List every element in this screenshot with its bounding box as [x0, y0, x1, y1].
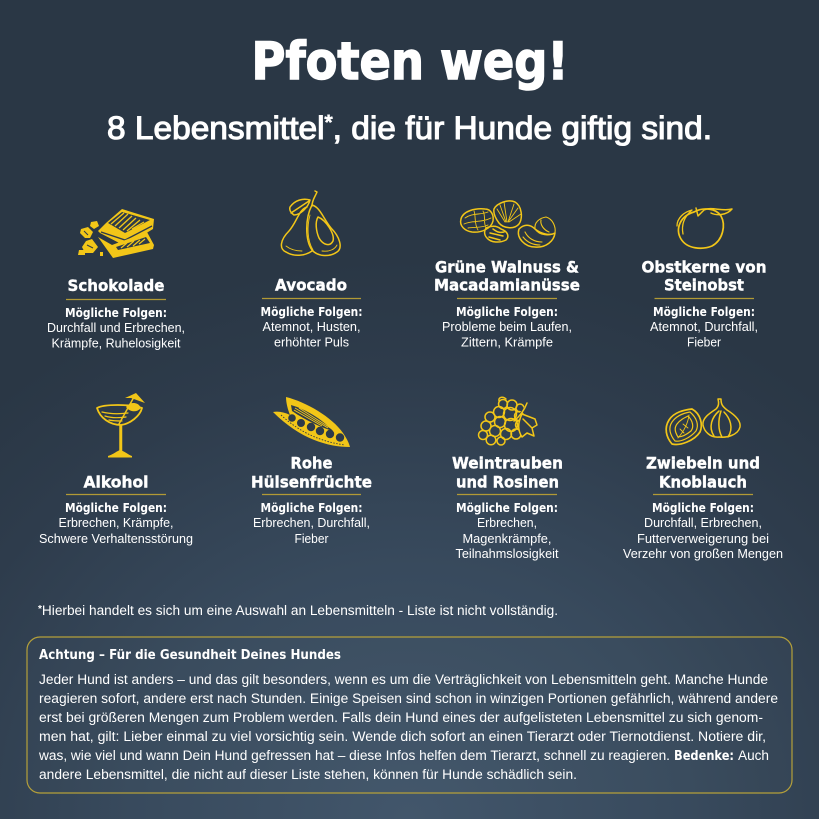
heading: Weintrauben und Rosinen: [452, 454, 563, 492]
callout panel: Achtung: [27, 637, 792, 793]
heading: Rohe Hülsenfrüchte: Rohe: [290, 454, 333, 472]
effects: Alkohol: Schwere Verhaltensstörung: [39, 531, 193, 546]
subtitle: , die für Hunde giftig sind.: [333, 110, 712, 146]
subtitle: *: [325, 112, 333, 134]
effects: Zwiebeln: [623, 500, 783, 561]
heading: Avocado: Avocado: [275, 276, 347, 294]
effects: Schokolade: Durchfall und Erbrechen,: [47, 320, 185, 335]
heading: Weintrauben und Rosinen: und Rosinen: [456, 472, 559, 492]
effects: Zwiebeln: Verzehr von großen Mengen: [623, 546, 783, 561]
subtitle: 8 Lebensmittel: [107, 110, 315, 146]
effects: Weintrauben: Magenkrämpfe,: [462, 531, 552, 546]
effects: Schokolade: Krämpfe, Ruhelosigkeit: [52, 336, 181, 350]
icon: chocolate: [78, 209, 154, 258]
effects: Avocado: [260, 304, 362, 350]
effects: Weintrauben: Mögliche Folgen:: [456, 500, 558, 515]
item: Walnuss: [434, 201, 580, 350]
icon: grapes: [478, 397, 537, 445]
heading: Grüne Walnuss und Macadamianüsse: Macadamianüsse: [434, 276, 580, 294]
heading: Alkohol: Alkohol: [84, 472, 148, 492]
icon: pea pod: [273, 397, 350, 447]
callout heading: Achtung – Für die Gesundheit Deines Hundes: [39, 648, 341, 663]
callout body text: Jeder Hund ist anders – und das gilt besonders, wenn es um die Verträglichkeit von Lebensmitteln geht. Manche Hunde: [39, 672, 768, 687]
heading: Zwiebeln und Knoblauch: [646, 454, 760, 492]
effects: Zwiebeln: Mögliche Folgen:: [652, 500, 754, 515]
callout body text: men hat, gilt: Lieber einmal zu viel vorsichtig sein. Wende dich sofort an einen Tierarzt oder Tiernotdienst. Notiere dir,: [39, 729, 766, 744]
effects: Weintrauben: [456, 500, 559, 561]
effects: Hülsenfrüchte: Fieber: [294, 531, 329, 546]
effects: Alkohol: Erbrechen, Krämpfe,: [58, 515, 174, 530]
effects: Schokolade: Mögliche Folgen:: [65, 305, 167, 320]
item: Schokolade: [47, 209, 185, 350]
icon: nuts: [461, 201, 555, 247]
item: Hülsenfrüchte: [251, 397, 372, 546]
title: Pfoten weg!: [252, 32, 568, 92]
heading: Schokolade: Schokolade: [68, 276, 165, 295]
effects: Alkohol: Mögliche Folgen:: [65, 500, 167, 515]
icon: cocktail: [97, 393, 145, 458]
effects: Walnuss: Probleme beim Laufen,: [442, 319, 572, 334]
icon: onion and garlic: [666, 399, 740, 444]
callout body text: was, wie viel und wann Dein Hund gefressen hat – diese Infos helfen dem Tierarzt, schnell zu reagieren.: [38, 748, 670, 763]
callout body text: erst bei größeren Mengen zum Problem werden. Falls dein Hund eines der aufgelisteten Lebensmittel zu sich genom-: [39, 710, 763, 725]
effects: Walnuss: Zittern, Krämpfe: [461, 334, 553, 350]
effects: Hülsenfrüchte: Erbrechen, Durchfall,: [253, 515, 370, 530]
callout body text: Bedenke:: [674, 749, 734, 764]
effects: Walnuss: [442, 304, 572, 350]
effects: Zwiebeln: Futterverweigerung bei: [637, 531, 769, 546]
item: Obstkerne: [642, 208, 766, 350]
callout body text: [38, 672, 778, 782]
effects: Weintrauben: Erbrechen,: [477, 515, 537, 530]
item: Avocado: [260, 191, 362, 350]
effects: Weintrauben: Teilnahmslosigkeit: [456, 546, 559, 561]
callout body text: Auch: [738, 748, 769, 763]
footnote: *: [38, 604, 42, 615]
callout body text: andere Lebensmittel, die nicht auf dieser Liste stehen, können für Hunde schädlich sein.: [39, 767, 577, 782]
footnote: Hierbei handelt es sich um eine Auswahl an Lebensmitteln - Liste ist nicht vollständig.: [42, 603, 558, 618]
icon: avocado: [281, 191, 340, 256]
heading: Zwiebeln und Knoblauch: Knoblauch: [659, 472, 747, 492]
heading: Rohe Hülsenfrüchte: Hülsenfrüchte: [251, 472, 372, 492]
effects: Alkohol: [39, 500, 193, 546]
effects: Obstkerne: Mögliche Folgen:: [653, 304, 755, 319]
item: Zwiebeln: [623, 399, 783, 561]
effects: Avocado: erhöhter Puls: [274, 334, 349, 350]
item: Alkohol: [39, 393, 193, 546]
effects: Hülsenfrüchte: Mögliche Folgen:: [260, 500, 362, 515]
effects: Obstkerne: [650, 304, 758, 350]
heading: Zwiebeln und Knoblauch: Zwiebeln und: [646, 454, 760, 472]
effects: Obstkerne: Atemnot, Durchfall,: [650, 319, 758, 334]
heading: Rohe Hülsenfrüchte: [251, 454, 372, 492]
effects: Hülsenfrüchte: [253, 500, 370, 546]
heading: Obstkerne von Steinobst: Steinobst: [664, 276, 744, 294]
heading: Weintrauben und Rosinen: Weintrauben: [452, 454, 563, 472]
heading: Obstkerne von Steinobst: [642, 258, 766, 294]
effects: Avocado: Atemnot, Husten,: [262, 319, 360, 334]
effects: Zwiebeln: Durchfall, Erbrechen,: [644, 515, 762, 530]
heading: Grüne Walnuss und Macadamianüsse: [434, 258, 580, 294]
effects: Obstkerne: Fieber: [687, 334, 722, 350]
effects: Walnuss: Mögliche Folgen:: [456, 304, 558, 319]
effects: Avocado: Mögliche Folgen:: [260, 304, 362, 319]
item: Weintrauben: [452, 397, 563, 561]
callout body text: reagieren sofort, andere erst nach Stunden. Einige Speisen sind schon in winzigen Portionen gefährlich, während andere: [39, 691, 778, 706]
effects: Schokolade: [47, 305, 185, 350]
icon: peach: [677, 208, 732, 248]
heading: Obstkerne von Steinobst: Obstkerne von: [642, 258, 766, 276]
heading: Grüne Walnuss und Macadamianüsse: Grüne Walnuss &: [435, 258, 579, 276]
